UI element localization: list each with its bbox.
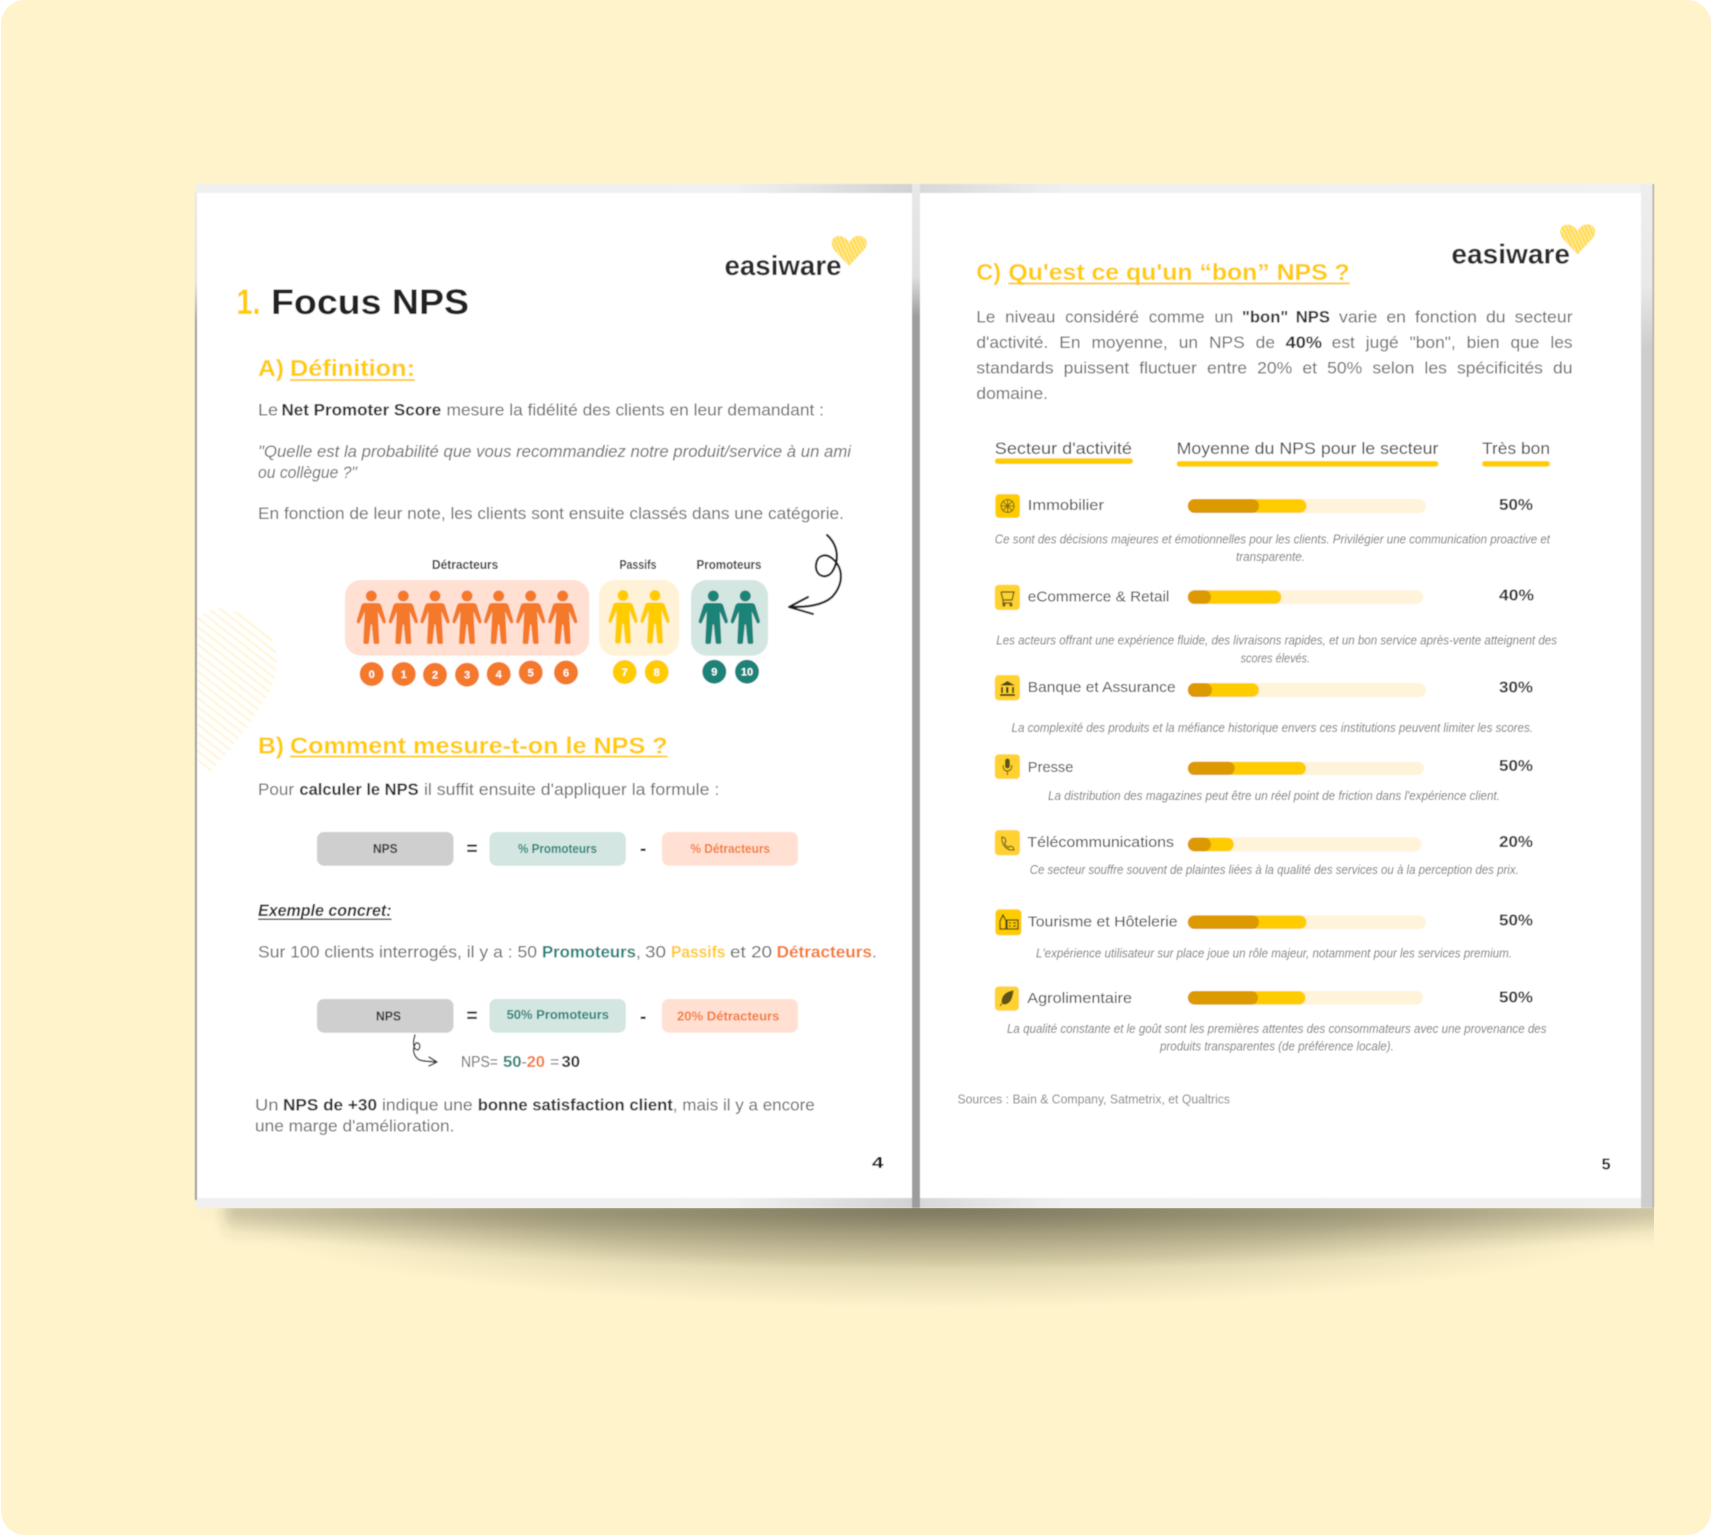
column: Secteur d'activité: Secteur d'activité <box>995 440 1132 458</box>
box: % Promoteurs: % Promoteurs <box>518 842 597 856</box>
text: calculation: NPS= <box>461 1054 498 1071</box>
icon: leaf <box>995 986 1019 1011</box>
scores: 7 and 8 <box>613 660 669 684</box>
text: sources: Sources : Bain & Company, Satmetrix, et Qualtrics <box>958 1092 1230 1107</box>
scores: 0 to 6: 1 <box>401 669 407 681</box>
scores: 7 and 8: 8 <box>654 667 660 679</box>
formula: worked example: = <box>466 1006 478 1027</box>
row: Banque et Assurance: 30% <box>1499 680 1533 696</box>
row: Télécommunications: Télécommunications <box>1027 834 1174 851</box>
column: Moyenne du NPS pour le secteur: Moyenne du NPS pour le secteur <box>1177 440 1439 458</box>
progress bar 40% <box>1188 590 1423 604</box>
page number 5: 5 <box>1602 1156 1611 1173</box>
column: Très bon <box>1482 440 1550 467</box>
text: calculation <box>461 1054 580 1071</box>
row: Agrolimentaire <box>995 986 1546 1054</box>
icon: microphone <box>995 754 1020 779</box>
heading: C) Qu'est ce qu'un bon NPS: Qu'est ce qu'un “bon” NPS ? <box>1008 259 1350 285</box>
progress bar 50% <box>1188 762 1424 775</box>
text: survey question: "Quelle est la probabilité que vous recommandiez notre produit/service à un ami <box>258 442 852 461</box>
heading: B) Comment mesure-t-on le NPS: B) <box>258 732 284 758</box>
box: % Détracteurs: % Détracteurs <box>690 842 770 856</box>
note <box>996 634 1557 665</box>
row: Tourisme et Hôtelerie: 50% <box>1499 913 1533 930</box>
row: Banque et Assurance <box>995 675 1533 735</box>
row: Immobilier: 50% <box>1499 497 1533 514</box>
text: example data: Sur 100 clients interrogés, il y a : 50 <box>258 942 537 961</box>
chart: NPS categories pictogram <box>345 558 768 687</box>
note: La complexité des produits et la méfiance historique envers ces institutions peuvent limiter les scores. <box>1012 721 1533 735</box>
note: Les acteurs offrant une expérience fluide, des livraisons rapides, et un bon service après-vente atteignent des <box>996 634 1557 648</box>
row: Télécommunications <box>995 830 1533 877</box>
formula: worked example: - <box>640 1007 646 1028</box>
row: Banque et Assurance: Banque et Assurance <box>1028 679 1176 696</box>
text: formula intro <box>258 780 719 799</box>
row: Presse: Presse <box>1028 759 1073 776</box>
text: introduction paragraph: "bon" NPS <box>1242 308 1330 327</box>
text: definition intro: mesure la fidélité des clients en leur demandant : <box>446 400 824 420</box>
text: introduction paragraph: Le niveau considéré comme un <box>976 308 1233 327</box>
text: categories intro: En fonction de leur note, les clients sont ensuite classés dans une catégorie. <box>258 504 844 523</box>
right page <box>920 184 1654 1208</box>
scores: 7 and 8: 7 <box>622 667 628 679</box>
row: eCommerce & Retail: 40% <box>1499 588 1534 605</box>
text: survey question: ou collègue ?" <box>258 463 358 482</box>
row: Tourisme et Hôtelerie: Tourisme et Hôtelerie <box>1028 914 1178 930</box>
text: conclusion <box>255 1096 815 1136</box>
arrow: curly hand-drawn <box>789 535 841 614</box>
note <box>1007 1022 1546 1054</box>
progress bar 50% <box>1188 991 1423 1005</box>
text: definition intro <box>258 400 824 420</box>
text: formula intro: calculer le NPS <box>299 780 419 799</box>
progress bar 50% <box>1188 915 1426 929</box>
box: 20% Détracteurs: 20% Détracteurs <box>677 1010 779 1024</box>
column: Secteur d'activité <box>995 440 1133 464</box>
text: introduction paragraph <box>976 308 1573 403</box>
box: NPS <box>317 832 454 866</box>
formula: NPS definition: - <box>640 839 646 860</box>
left page <box>190 184 920 1208</box>
group: promoters people <box>691 580 768 656</box>
open book <box>190 184 1654 1208</box>
scores: 0 to 6: 0 <box>369 669 375 681</box>
note: La distribution des magazines peut être un réel point de friction dans l'expérience client. <box>1048 789 1500 803</box>
text: calculation: - <box>522 1054 527 1071</box>
text: example data: Passifs <box>671 942 725 961</box>
logo: easiware: easiware <box>724 250 842 281</box>
text: example data: 30 <box>645 942 666 961</box>
progress bar 20% <box>1188 838 1421 851</box>
note: L'expérience utilisateur sur place joue un rôle majeur, notamment pour les services premium. <box>1036 946 1512 960</box>
text: conclusion: bonne satisfaction client <box>478 1096 673 1115</box>
icon: phone <box>995 830 1020 855</box>
label: Détracteurs: Détracteurs <box>432 558 498 572</box>
note: transparente. <box>1236 550 1305 564</box>
icon: property <box>995 494 1020 518</box>
box: 50% Promoteurs <box>489 999 626 1033</box>
box: 50% Promoteurs: 50% Promoteurs <box>507 1008 609 1022</box>
note: Ce secteur souffre souvent de plaintes liées à la qualité des services ou à la perception des prix. <box>1030 863 1519 877</box>
formula: NPS definition <box>317 832 798 866</box>
title: 1. <box>236 283 260 322</box>
text: conclusion: Un <box>255 1096 278 1115</box>
book shadow <box>217 1208 1654 1296</box>
heading: B) Comment mesure-t-on le NPS: Comment mesure-t-on le NPS ? <box>290 732 668 758</box>
group: detractors people <box>345 580 589 656</box>
box: NPS: NPS <box>376 1010 401 1024</box>
text: calculation: 50 <box>503 1054 522 1071</box>
icon: logo heart <box>832 236 867 266</box>
row: Agrolimentaire: 50% <box>1499 990 1533 1006</box>
scores: 0 to 6: 2 <box>432 670 438 682</box>
text: calculation: 30 <box>562 1054 580 1071</box>
column: Moyenne du NPS pour le secteur <box>1177 440 1439 467</box>
box: NPS <box>317 999 454 1033</box>
box: NPS: NPS <box>373 842 398 856</box>
row: eCommerce & Retail <box>995 585 1557 665</box>
text: example data: , <box>636 942 641 961</box>
text: introduction paragraph: domaine. <box>976 384 1048 403</box>
logo: easiware <box>1451 224 1595 269</box>
formula: worked example <box>317 999 798 1033</box>
text: example heading: Exemple concret: <box>258 901 392 920</box>
row: Télécommunications: 20% <box>1499 834 1533 851</box>
box: % Promoteurs <box>489 832 626 866</box>
text: calculation: = <box>550 1054 559 1071</box>
text: definition intro: Net Promoter Score <box>282 400 441 420</box>
note: Ce sont des décisions majeures et émotionnelles pour les clients. Privilégier une communication proactive et <box>995 532 1550 546</box>
text: formula intro: Pour <box>258 780 294 799</box>
column: Très bon: Très bon <box>1482 440 1550 458</box>
text: example data: Détracteurs <box>777 942 872 961</box>
text: example data: et 20 <box>730 942 772 961</box>
scores: 9 and 10: 10 <box>741 667 753 679</box>
row: Agrolimentaire: Agrolimentaire <box>1027 990 1132 1007</box>
icon: bank <box>995 675 1020 700</box>
formula: NPS definition: = <box>466 839 478 860</box>
note: produits transparentes (de préférence locale). <box>1159 1040 1394 1054</box>
heading: A) Définition: A) <box>258 355 284 381</box>
logo: easiware <box>724 236 867 281</box>
label: Passifs: Passifs <box>620 558 657 572</box>
scores: 9 and 10: 9 <box>711 667 717 679</box>
page number 4: 4 <box>872 1155 884 1172</box>
row: Tourisme et Hôtelerie <box>995 909 1533 960</box>
scores: 0 to 6: 5 <box>528 668 534 680</box>
text: calculation: 20 <box>527 1054 545 1071</box>
text: example data: . <box>872 942 877 961</box>
icon: logo heart <box>1560 224 1595 254</box>
row: Presse <box>995 754 1533 803</box>
text: conclusion: , mais il y a encore <box>673 1096 815 1115</box>
row: eCommerce & Retail: eCommerce & Retail <box>1028 589 1169 606</box>
progress bar 50% <box>1188 499 1426 513</box>
table header <box>995 440 1550 467</box>
box: % Détracteurs <box>662 832 798 866</box>
heading: C) Qu'est ce qu'un bon NPS: C) <box>976 259 1001 285</box>
text: introduction paragraph: est jugé "bon", bien que les <box>1332 333 1573 352</box>
label: Promoteurs: Promoteurs <box>696 558 762 572</box>
text: survey question <box>258 442 852 482</box>
note: La qualité constante et le goût sont les premières attentes des consommateurs avec une provenance des <box>1007 1022 1546 1036</box>
scores: 0 to 6: 6 <box>563 668 569 680</box>
icon: hotel <box>995 909 1022 935</box>
text: introduction paragraph: standards puissent fluctuer entre 20% et 50% selon les spécificités du <box>976 358 1573 378</box>
scores: 0 to 6: 4 <box>496 669 503 681</box>
arrow: small curly <box>414 1035 437 1066</box>
text: formula intro: il suffit ensuite d'appliquer la formule : <box>424 780 719 799</box>
text: conclusion: une marge d'amélioration. <box>255 1117 454 1136</box>
box: 20% Détracteurs <box>662 999 798 1033</box>
text: example data <box>258 942 877 961</box>
group: passives people <box>599 580 679 656</box>
text: introduction paragraph: varie en fonction du secteur <box>1339 308 1573 327</box>
heading: A) Définition: Définition: <box>290 355 415 381</box>
row: Presse: 50% <box>1499 758 1533 775</box>
text: introduction paragraph: 40% <box>1286 333 1322 352</box>
progress bar 30% <box>1188 683 1426 697</box>
decorative hatched heart <box>196 608 277 772</box>
scores: 0 to 6: 3 <box>464 670 470 682</box>
note <box>995 532 1550 564</box>
note: scores élevés. <box>1241 651 1310 665</box>
text: conclusion: NPS de +30 <box>283 1096 377 1115</box>
text: definition intro: Le <box>258 400 278 420</box>
row: Immobilier: Immobilier <box>1028 497 1104 514</box>
scores: 0 to 6 <box>360 660 578 687</box>
text: conclusion: indique une <box>382 1096 473 1115</box>
text: introduction paragraph: d'activité. En moyenne, un NPS de <box>976 333 1275 352</box>
text: example data: Promoteurs <box>542 942 636 961</box>
scores: 9 and 10 <box>702 660 759 684</box>
logo: easiware: easiware <box>1451 238 1570 269</box>
title: Focus NPS <box>271 283 469 322</box>
row: Immobilier <box>995 494 1550 564</box>
icon: cart <box>995 585 1020 610</box>
